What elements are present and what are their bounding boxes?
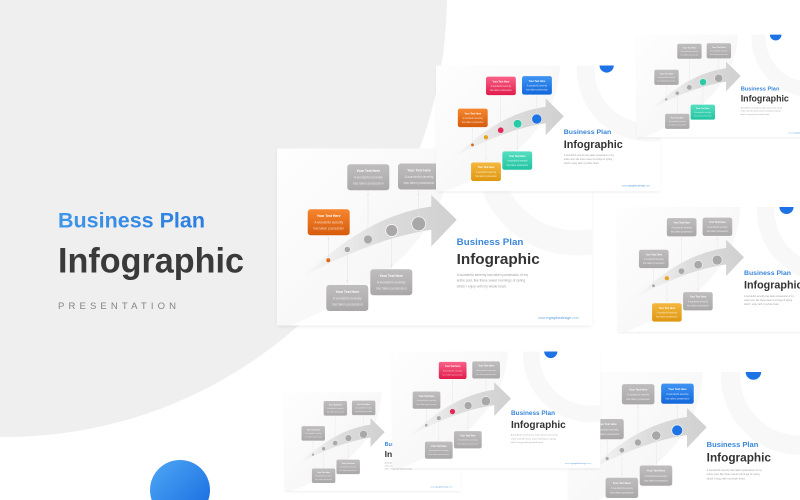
panel: slide bottom-left, all gray: A wonderful serenity xyxy=(356,407,372,410)
callout: bottom left: has taken possession xyxy=(332,302,363,306)
panel: slide right-middle, yellow highlight: Your Text Here xyxy=(673,222,691,225)
panel: slide bottom-center, pink highlight: Your Text Here xyxy=(431,445,447,448)
panel: slide bottom-center, pink highlight xyxy=(392,352,600,470)
panel: slide bottom-center, pink highlight: has taken possession xyxy=(416,403,437,406)
panel: slide top-right, green highlight: Your Text Here xyxy=(670,116,685,119)
panel: slide bottom-left, all gray: Your Text Here xyxy=(357,403,370,406)
panel: slide bottom-center, pink highlight: has taken possession xyxy=(443,373,464,376)
panel: main slide, orange highlight: which I enjoy with my whole heart. xyxy=(457,284,507,288)
panel: main slide, orange highlight: entire soul, like these sweet mornings of spring xyxy=(457,278,525,282)
panel: slide bottom-left, all gray: Your Text Here xyxy=(329,404,342,407)
timeline dots xyxy=(326,217,426,262)
panel: slide top-right, green highlight: A wonderful serenity xyxy=(694,111,711,114)
panel: main slide, orange highlight: A wonderful serenity has taken possession of my xyxy=(457,273,528,277)
panel: slide bottom-right, blue highlight: Your Text Here xyxy=(668,387,687,391)
panel: slide bottom-right, blue highlight: A wonderful serenity xyxy=(627,393,650,396)
panel: slide top-center, all colors: Your Text Here xyxy=(509,155,526,158)
panel: slide bottom-right, blue highlight: has taken possession xyxy=(666,398,690,401)
panel: slide top-right, green highlight: has taken possession xyxy=(668,124,686,127)
panel: slide right-middle, yellow highlight: has taken possession xyxy=(687,305,709,308)
panel: slide right-middle, yellow highlight: Business Plan xyxy=(744,270,791,277)
panel: slide top-center, all colors: A wonderful serenity xyxy=(507,160,528,163)
callout: bottom right: has taken possession xyxy=(376,287,407,291)
subtitle: presentation: PRESENTATION xyxy=(58,301,176,312)
panel: slide bottom-left, all gray: entire soul, like these sweet mornings of spring xyxy=(385,465,423,468)
panel: slide top-right, green highlight: A wonderful serenity xyxy=(711,50,727,53)
panel: slide top-right, green highlight: which I enjoy with my whole heart. xyxy=(741,113,770,116)
panel: slide right-middle, yellow highlight: A wonderful serenity xyxy=(672,226,693,229)
callout: orange: Your Text Here xyxy=(317,214,341,218)
panel: slide right-middle, yellow highlight: has taken possession xyxy=(656,316,678,319)
panel: slide top-right, green highlight: Business Plan xyxy=(741,87,780,93)
panel: slide top-center, all colors: Your Text Here xyxy=(464,112,482,115)
callout: top right: A wonderful serenity xyxy=(405,175,434,179)
panel: slide right-middle, yellow highlight: A wonderful serenity xyxy=(644,258,665,261)
panel: slide top-right, green highlight: has taken possession xyxy=(694,114,712,117)
callout: top right: has taken possession xyxy=(404,181,435,185)
callout: top left: A wonderful serenity xyxy=(354,176,383,180)
panel: slide bottom-center, pink highlight: A wonderful serenity xyxy=(477,369,497,372)
panel: slide top-right, green highlight: A wonderful serenity has taken possession of my xyxy=(741,107,782,110)
panel: slide bottom-center, pink highlight: entire soul, like these sweet mornings of spring xyxy=(511,437,557,440)
panel: slide bottom-center, pink highlight: Infographic xyxy=(511,420,566,431)
callout: bottom left: Your Text Here xyxy=(335,290,359,294)
panel: slide bottom-right, blue highlight: has taken possession xyxy=(596,433,620,436)
panel: slide top-right, green highlight: A wonderful serenity xyxy=(669,120,686,123)
panel: slide bottom-center, pink highlight: which I enjoy with my whole heart. xyxy=(511,441,544,444)
panel: slide right-middle, yellow highlight: Your Text Here xyxy=(709,221,726,224)
callout: top left: has taken possession xyxy=(353,182,384,186)
panel: slide right-middle, yellow highlight: Your Text Here xyxy=(690,296,707,299)
panel: slide bottom-right, blue highlight: A wonderful serenity xyxy=(666,393,689,396)
panel: slide bottom-left, all gray: has taken possession xyxy=(305,436,322,439)
callout: top right xyxy=(398,164,440,190)
panel: slide right-middle, yellow highlight: has taken possession xyxy=(671,231,693,234)
panel: slide bottom-left, all gray: A wonderful serenity has taken possession of my xyxy=(385,461,424,464)
panel: slide bottom-left, all gray: has taken possession xyxy=(315,478,332,481)
callout: top left: Your Text Here xyxy=(356,169,380,173)
panel: slide right-middle, yellow highlight: A wonderful serenity xyxy=(657,311,678,314)
panel: slide bottom-right, blue highlight: has taken possession xyxy=(610,492,634,495)
panel: slide bottom-center, pink highlight: has taken possession xyxy=(458,443,479,446)
panel: slide top-center, all colors: A wonderful serenity xyxy=(476,171,497,174)
panel: slide top-right, green highlight: has taken possession xyxy=(710,53,728,56)
panel: slide bottom-center, pink highlight: has taken possession xyxy=(476,373,497,376)
panel: slide bottom-left, all gray: has taken possession xyxy=(327,410,344,413)
panel: slide bottom-left, all gray: Business Plan xyxy=(385,442,422,448)
panel: slide bottom-center, pink highlight: Your Text Here xyxy=(460,434,476,437)
panel: slide bottom-right, blue highlight: has taken possession xyxy=(644,479,668,482)
callout: bottom right: Your Text Here xyxy=(379,274,403,278)
panel: slide right-middle, yellow highlight: which I enjoy with my whole heart. xyxy=(744,303,779,306)
panel: slide top-right, green highlight: Your Text Here xyxy=(712,46,727,49)
panel: slide top-center, all colors: has taken possession xyxy=(506,164,529,167)
heading: Infographic: Infographic xyxy=(58,242,244,281)
panel: slide bottom-center, pink highlight: Your Text Here xyxy=(419,395,435,398)
panel: slide bottom-left, all gray: A wonderful serenity xyxy=(316,475,332,478)
panel: slide top-center, all colors: A wonderful serenity xyxy=(491,85,512,88)
panel: slide top-right, green highlight xyxy=(638,34,800,138)
callout: top right: Your Text Here xyxy=(407,168,431,172)
panel: slide top-right, green highlight: Infographic xyxy=(741,94,789,104)
callout: bottom left xyxy=(326,285,368,311)
panel: slide top-center, all colors: A wonderful serenity has taken possession of my xyxy=(564,154,615,157)
panel: slide top-right, green highlight: A wonderful serenity xyxy=(681,50,698,53)
panel: slide top-center, all colors: Your Text Here xyxy=(493,80,510,83)
panel: slide top-center, all colors: Infographic xyxy=(564,139,623,151)
panel: slide right-middle, yellow highlight: has taken possession xyxy=(643,262,665,265)
panel: slide bottom-right, blue highlight: Infographic xyxy=(707,452,771,465)
panel: slide top-center, all colors: Your Text Here xyxy=(478,166,495,169)
panel: slide bottom-center, pink highlight: A wonderful serenity xyxy=(429,449,449,452)
panel: slide top-center, all colors: has taken possession xyxy=(490,89,513,92)
panel: slide top-center, all colors: Your Text Here xyxy=(529,80,546,83)
callout: bottom right xyxy=(370,269,412,295)
panel: slide top-center, all colors: has taken possession xyxy=(462,121,484,124)
panel: slide top-center, all colors: Business Plan xyxy=(564,129,611,136)
panel: slide right-middle, yellow highlight: A wonderful serenity xyxy=(707,226,728,229)
arrow xyxy=(322,195,456,266)
panel: slide top-center, all colors: www. rrgraphicdesign .com xyxy=(622,186,650,188)
panel: slide bottom-right, blue highlight: entire soul, like these sweet mornings of spring xyxy=(707,472,760,476)
heading: Business Plan: Business Plan xyxy=(58,209,205,233)
panel: slide bottom-left, all gray: Infographic xyxy=(385,449,431,459)
panel: slide right-middle, yellow highlight: A wonderful serenity has taken possession of my xyxy=(744,295,795,298)
background: large gray circle xyxy=(0,0,447,437)
panel: slide bottom-right, blue highlight: Your Text Here xyxy=(613,481,632,485)
panel: slide top-center, all colors: A wonderful serenity xyxy=(527,84,548,87)
footer url: www.rrgraphicdesign.com xyxy=(538,316,579,320)
panel: slide bottom-right, blue highlight: A wonderful serenity xyxy=(611,487,634,490)
panel: slide top-center, all colors: has taken possession xyxy=(526,89,549,92)
panel: slide top-center, all colors: which I enjoy with my whole heart. xyxy=(564,162,599,165)
panel: slide top-right, green highlight: A wonderful serenity xyxy=(658,76,675,79)
callout: bottom right: A wonderful serenity xyxy=(377,281,406,285)
panel: slide bottom-center, pink highlight: Your Text Here xyxy=(478,365,495,368)
panel: slide bottom-left, all gray xyxy=(286,400,459,492)
panel: slide bottom-left, all gray: Your Text Here xyxy=(342,462,355,465)
panel: slide bottom-right, blue highlight: has taken possession xyxy=(626,398,651,401)
panel: slide top-center, all colors: A wonderful serenity xyxy=(463,117,484,120)
panel: slide bottom-left, all gray: which I enjoy with my whole heart. xyxy=(385,468,413,471)
panel: slide bottom-right, blue highlight: A wonderful serenity xyxy=(596,428,619,431)
panel: slide bottom-left, all gray: has taken possession xyxy=(355,410,372,413)
panel: main slide, orange highlight: Infographic xyxy=(457,251,540,268)
panel: slide bottom-center, pink highlight: A wonderful serenity xyxy=(443,369,463,372)
panel: slide bottom-center, pink highlight: A wonderful serenity xyxy=(458,439,478,442)
panel: slide bottom-right, blue highlight: Your Text Here xyxy=(629,387,648,391)
panel: slide top-center, all colors xyxy=(436,66,659,192)
panel: slide bottom-right, blue highlight xyxy=(590,372,771,498)
panel: slide bottom-right, blue highlight: Your Text Here xyxy=(647,469,666,473)
callout: orange xyxy=(308,209,350,235)
panel: slide bottom-left, all gray: Your Text Here xyxy=(307,429,320,432)
panel: slide top-right, green highlight: Your Text Here xyxy=(660,72,674,75)
panel: slide bottom-right, blue highlight: A wonderful serenity has taken possession of my xyxy=(707,468,762,472)
panel: slide bottom-right, blue highlight: Business Plan xyxy=(707,440,759,449)
panel: slide bottom-center, pink highlight: www. rrgraphicdesign .com xyxy=(565,463,591,465)
panel: main slide, orange highlight xyxy=(277,148,590,327)
panel: slide right-middle, yellow highlight xyxy=(618,207,800,333)
panel: slide bottom-left, all gray: www. rrgraphicdesign .com xyxy=(430,486,453,488)
panel: slide bottom-center, pink highlight: has taken possession xyxy=(429,453,450,456)
panel: slide bottom-left, all gray: A wonderful serenity xyxy=(305,432,321,435)
panel: slide top-right, green highlight: Your Text Here xyxy=(683,46,697,49)
panel: slide bottom-center, pink highlight: Your Text Here xyxy=(445,365,461,368)
panel: slide bottom-left, all gray: Your Text Here xyxy=(317,471,330,474)
callout: top left xyxy=(347,164,389,190)
panel: slide right-middle, yellow highlight: Your Text Here xyxy=(645,253,663,256)
callout: orange: has taken possession xyxy=(313,227,344,231)
panel: slide top-center, all colors: has taken possession xyxy=(475,175,498,178)
panel: slide bottom-right, blue highlight: A wonderful serenity xyxy=(645,475,668,478)
callout: orange: A wonderful serenity xyxy=(314,221,343,225)
panel: slide bottom-center, pink highlight: A wonderful serenity xyxy=(417,399,437,402)
panel: slide top-center, all colors: entire soul, like these sweet mornings of spring xyxy=(564,158,613,161)
slide heading: Business Plan xyxy=(457,237,524,248)
panel: slide right-middle, yellow highlight: entire soul, like these sweet mornings of spring xyxy=(744,299,793,302)
panel: slide top-right, green highlight: Your Text Here xyxy=(696,107,711,110)
callout: bottom left: A wonderful serenity xyxy=(333,296,362,300)
panel: slide bottom-right, blue highlight: which I enjoy with my whole heart. xyxy=(707,477,746,481)
panel: slide bottom-right, blue highlight: Your Text Here xyxy=(598,422,617,426)
panel: slide right-middle, yellow highlight: has taken possession xyxy=(707,230,729,233)
panel: slide right-middle, yellow highlight: A wonderful serenity xyxy=(688,300,709,303)
panel: slide bottom-left, all gray: A wonderful serenity xyxy=(327,407,343,410)
blue decorative circle xyxy=(150,460,210,500)
panel: slide bottom-left, all gray: has taken possession xyxy=(340,469,357,472)
panel: slide bottom-center, pink highlight: Business Plan xyxy=(511,410,555,417)
panel: slide right-middle, yellow highlight: Your Text Here xyxy=(659,307,676,310)
panel: slide bottom-left, all gray: A wonderful serenity xyxy=(340,466,356,469)
panel: slide top-right, green highlight: has taken possession xyxy=(681,54,698,57)
panel: slide bottom-center, pink highlight: A wonderful serenity has taken possession of my xyxy=(511,434,559,437)
panel: slide top-right, green highlight: entire soul, like these sweet mornings of spring xyxy=(741,110,780,113)
panel: slide top-right, green highlight: has taken possession xyxy=(658,80,675,83)
